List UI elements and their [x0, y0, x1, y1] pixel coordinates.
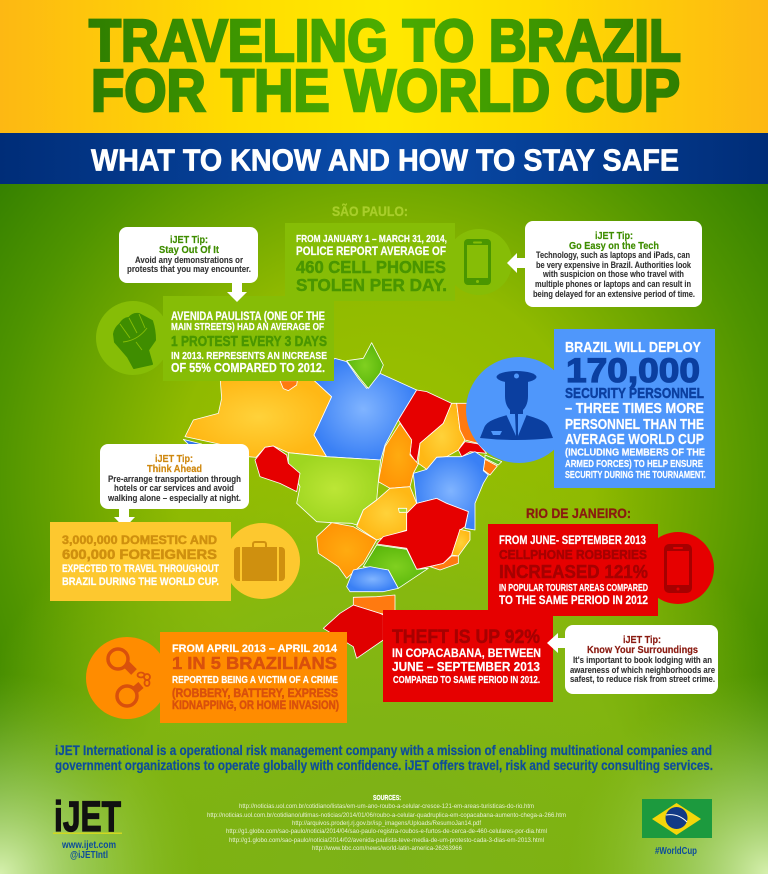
contact links: www.ijet.com	[61, 840, 116, 851]
flag of Brazil	[642, 799, 712, 857]
company description	[55, 743, 713, 773]
sources: http://g1.globo.com/sao-paulo/noticia/2014/04/sao-paulo-registra-roubos-e-furtos-de-cerca-de-460-celulares-por-dia.html	[226, 828, 548, 835]
tip: go easy on the tech: being delayed for an extensive period of time.	[533, 289, 695, 300]
panel: crime victims: (ROBBERY, BATTERY, EXPRESS	[172, 686, 338, 700]
tip: know your surroundings	[547, 625, 718, 694]
panel: security personnel	[466, 329, 715, 488]
sources: http://noticias.uol.com.br/cotidiano/ultimas-noticias/2014/01/06/roubo-a-celular-quadruplica-em-copacabana-aumento-chega-a-266.htm	[207, 812, 566, 819]
tip: go easy on the tech	[507, 221, 702, 307]
panel: travelers	[50, 522, 300, 601]
panel: theft in Copacabana: IN COPACABANA, BETWEEN	[392, 646, 541, 660]
arrow	[507, 253, 525, 273]
panel: travelers: 3,000,000 DOMESTIC AND	[62, 533, 217, 547]
panel: cellphone robberies: FROM JUNE- SEPTEMBER 2013	[499, 535, 646, 547]
tip: go easy on the tech: Technology, such as laptops and iPads, can	[536, 250, 690, 261]
arrow	[227, 283, 247, 302]
panel: travelers: EXPECTED TO TRAVEL THROUGHOUT	[62, 563, 219, 575]
tip: think ahead	[100, 444, 249, 528]
panel: crime victims	[86, 632, 347, 723]
tip: know your surroundings: iJET Tip:	[623, 634, 661, 646]
panel: crime victims: REPORTED BEING A VICTIM OF A CRIME	[172, 675, 338, 686]
panel: crime victims: FROM APRIL 2013 – APRIL 2014	[172, 643, 338, 655]
heading: Sao Paulo: SÃO PAULO:	[332, 204, 408, 219]
tip: think ahead: Think Ahead	[147, 463, 202, 475]
panel: cell phones stolen: STOLEN PER DAY.	[296, 275, 447, 295]
panel: cell phones stolen: POLICE REPORT AVERAGE OF	[296, 244, 446, 258]
contact links: @iJETIntl	[70, 850, 108, 861]
sources: http://arquivos.proderj.rj.gov.br/isp_imagens/Uploads/ResumoJan14.pdf	[292, 820, 481, 827]
tip: go easy on the tech: with suspicion on those who travel with	[542, 269, 684, 280]
sources: http://g1.globo.com/sao-paulo/noticia/2014/02/avenida-paulista-teve-media-de-um-protesto-cada-3-dias-em-2013.html	[229, 837, 545, 844]
panel: protests: AVENIDA PAULISTA (ONE OF THE	[171, 311, 325, 323]
tip: think ahead: hotels or car services and avoid	[114, 483, 234, 494]
panel: security personnel: SECURITY PERSONNEL	[565, 385, 704, 402]
tip: think ahead: iJET Tip:	[155, 453, 193, 465]
tip: go easy on the tech: Go Easy on the Tech	[569, 240, 659, 252]
page background	[0, 184, 768, 874]
panel: theft in Copacabana: COMPARED TO SAME PERIOD IN 2012.	[393, 675, 540, 686]
tip: know your surroundings: It's important to book lodging with an	[573, 655, 712, 666]
icon: handcuffs	[108, 649, 150, 706]
tip: go easy on the tech: multiple phones or laptops and can result in	[535, 279, 691, 290]
panel: crime victims: 1 IN 5 BRAZILIANS	[172, 653, 337, 673]
heading: Rio de Janeiro: RIO DE JANEIRO:	[526, 506, 631, 521]
panel: protests: 1 PROTEST EVERY 3 DAYS	[171, 333, 327, 350]
sources: http://noticias.uol.com.br/cotidiano/listas/em-um-ano-roubo-a-celular-cresce-121-em-areas-turisticas-do-rio.htm	[239, 803, 534, 810]
panel: theft in Copacabana	[383, 610, 553, 702]
title	[89, 8, 681, 124]
sources: SOURCES:	[373, 795, 401, 802]
panel: cellphone robberies: TO THE SAME PERIOD IN 2012	[499, 595, 648, 607]
tip: stay out of it: protests that you may encounter.	[127, 264, 251, 275]
contact links	[61, 840, 116, 861]
tip: know your surroundings: awareness of which neighborhoods are	[570, 665, 715, 676]
tip: go easy on the tech: be very expensive in Brazil. Authorities look	[536, 260, 692, 271]
title: TRAVELING TO BRAZIL	[89, 8, 681, 74]
tip: know your surroundings: safest, to reduce risk from street crime.	[570, 674, 715, 685]
panel: protests: MAIN STREETS) HAD AN AVERAGE OF	[171, 322, 324, 333]
panel: security personnel: 170,000	[566, 352, 700, 390]
tip: go easy on the tech: iJET Tip:	[595, 230, 633, 242]
panel: security personnel: BRAZIL WILL DEPLOY	[565, 340, 701, 356]
arrow	[547, 633, 565, 653]
panel: security personnel: PERSONNEL THAN THE	[565, 416, 704, 433]
tip: think ahead: Pre-arrange transportation through	[108, 474, 241, 485]
tip: stay out of it: Avoid any demonstrations or	[135, 255, 243, 266]
arrow	[114, 509, 135, 528]
panel: security personnel: SECURITY DURING THE TOURNAMENT.	[565, 470, 706, 481]
panel: cellphone robberies	[488, 524, 714, 616]
panel: security personnel: ARMED FORCES) TO HELP ENSURE	[565, 458, 703, 470]
tip: think ahead: walking alone – especially at night.	[107, 493, 241, 504]
panel: protests	[96, 296, 334, 381]
panel: cellphone robberies: INCREASED 121%	[499, 561, 648, 582]
tip: stay out of it: Stay Out Of It	[159, 244, 219, 256]
panel: theft in Copacabana: THEFT IS UP 92%	[392, 626, 540, 648]
sources	[207, 795, 566, 852]
icon: officer	[480, 371, 553, 440]
header band: title	[0, 0, 768, 133]
icon: phone	[664, 544, 692, 593]
panel: protests: OF 55% COMPARED TO 2012.	[171, 361, 325, 375]
hashtag: #WorldCup	[655, 846, 697, 857]
tip: stay out of it: iJET Tip:	[170, 234, 208, 246]
panel: theft in Copacabana: JUNE – SEPTEMBER 2013	[392, 660, 540, 674]
panel: cell phones stolen: 460 CELL PHONES	[296, 257, 446, 277]
logo: iJET	[53, 793, 122, 861]
panel: travelers: 600,000 FOREIGNERS	[62, 547, 217, 562]
subtitle band	[0, 133, 768, 184]
tip: stay out of it	[119, 227, 258, 302]
logo: iJET: iJET	[54, 793, 121, 841]
panel: cellphone robberies: CELLPHONE ROBBERIES	[499, 547, 647, 562]
panel: cell phones stolen	[285, 223, 512, 301]
panel: security personnel: – THREE TIMES MORE	[565, 400, 704, 417]
panel: cell phones stolen: FROM JANUARY 1 – MARCH 31, 2014,	[296, 233, 447, 245]
panel: cellphone robberies: IN POPULAR TOURIST AREAS COMPARED	[499, 583, 648, 594]
title: FOR THE WORLD CUP	[91, 58, 680, 124]
subtitle: WHAT TO KNOW AND HOW TO STAY SAFE	[91, 142, 679, 178]
panel: security personnel: AVERAGE WORLD CUP	[565, 431, 704, 448]
panel: crime victims: KIDNAPPING, OR HOME INVASION)	[172, 698, 339, 712]
panel: protests: IN 2013. REPRESENTS AN INCREASE	[171, 350, 327, 362]
icon: fist	[114, 314, 155, 368]
panel: travelers: BRAZIL DURING THE WORLD CUP.	[62, 576, 219, 588]
tip: know your surroundings: Know Your Surroundings	[587, 644, 698, 656]
panel: security personnel: (INCLUDING MEMBERS OF THE	[565, 446, 705, 458]
sources: http://www.bbc.com/news/world-latin-america-26263966	[312, 845, 462, 852]
map of Brazil	[183, 343, 502, 658]
icon: phone	[464, 239, 491, 285]
icon: suitcase	[234, 542, 285, 581]
